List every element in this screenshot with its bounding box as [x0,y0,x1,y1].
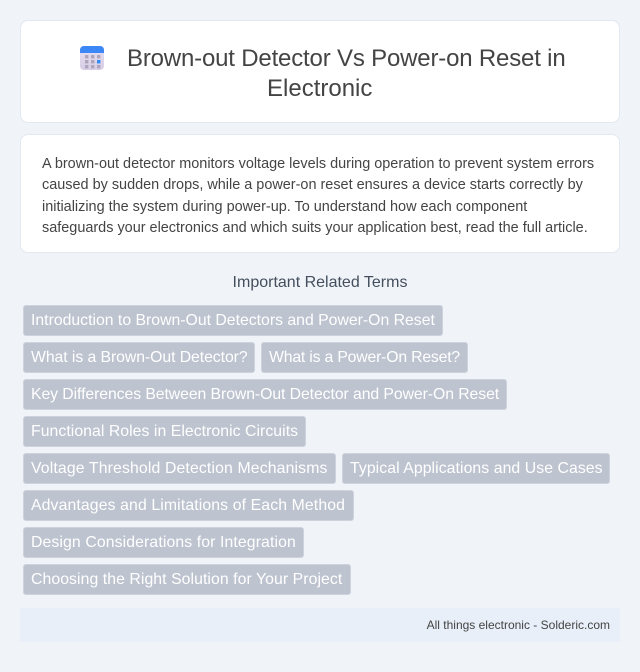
tag: What is a Power-On Reset? [269,349,460,366]
tag [23,527,304,558]
tag: Voltage Threshold Detection Mechanisms [31,460,328,477]
icon: calendar [80,46,104,70]
tag: Design Considerations for Integration [31,534,296,551]
panel: summary text [20,134,620,253]
tag: What is a Brown-Out Detector? [31,349,248,366]
text block: summary: A brown-out detector monitors voltage levels during operation to prevent system errors [42,156,594,172]
tag [23,379,507,410]
tag [23,416,306,447]
text block: summary: safeguards your electronics and which suits your application best, read the full article. [42,220,588,236]
tag: Functional Roles in Electronic Circuits [31,423,298,440]
tag: Introduction to Brown-Out Detectors and Power-On Reset [31,312,435,329]
tag [23,305,443,336]
tag: Advantages and Limitations of Each Method [31,497,345,514]
panel: title card [20,20,620,123]
tag: Key Differences Between Brown-Out Detector and Power-On Reset [31,386,499,403]
tag [23,453,336,484]
title: Brown-out Detector Vs Power-on Reset in [127,45,566,72]
footer [20,608,620,642]
tag: Typical Applications and Use Cases [350,460,603,477]
title: Electronic [267,75,372,102]
tag [23,490,354,521]
tag: Choosing the Right Solution for Your Project [31,571,342,588]
tag [261,342,468,373]
text block: summary [42,156,594,236]
tag [23,342,255,373]
tag [342,453,610,484]
title [127,45,566,102]
panel: term tags [23,305,610,595]
text block: summary: caused by sudden drops, while a power-on reset ensures a device starts correctly by [42,177,583,193]
footer: All things electronic - Solderic.com [427,618,610,632]
text block: summary: initializing the system during power-up. To understand how each component [42,198,527,214]
tag [23,564,351,595]
heading: related terms: Important Related Terms [233,274,407,291]
